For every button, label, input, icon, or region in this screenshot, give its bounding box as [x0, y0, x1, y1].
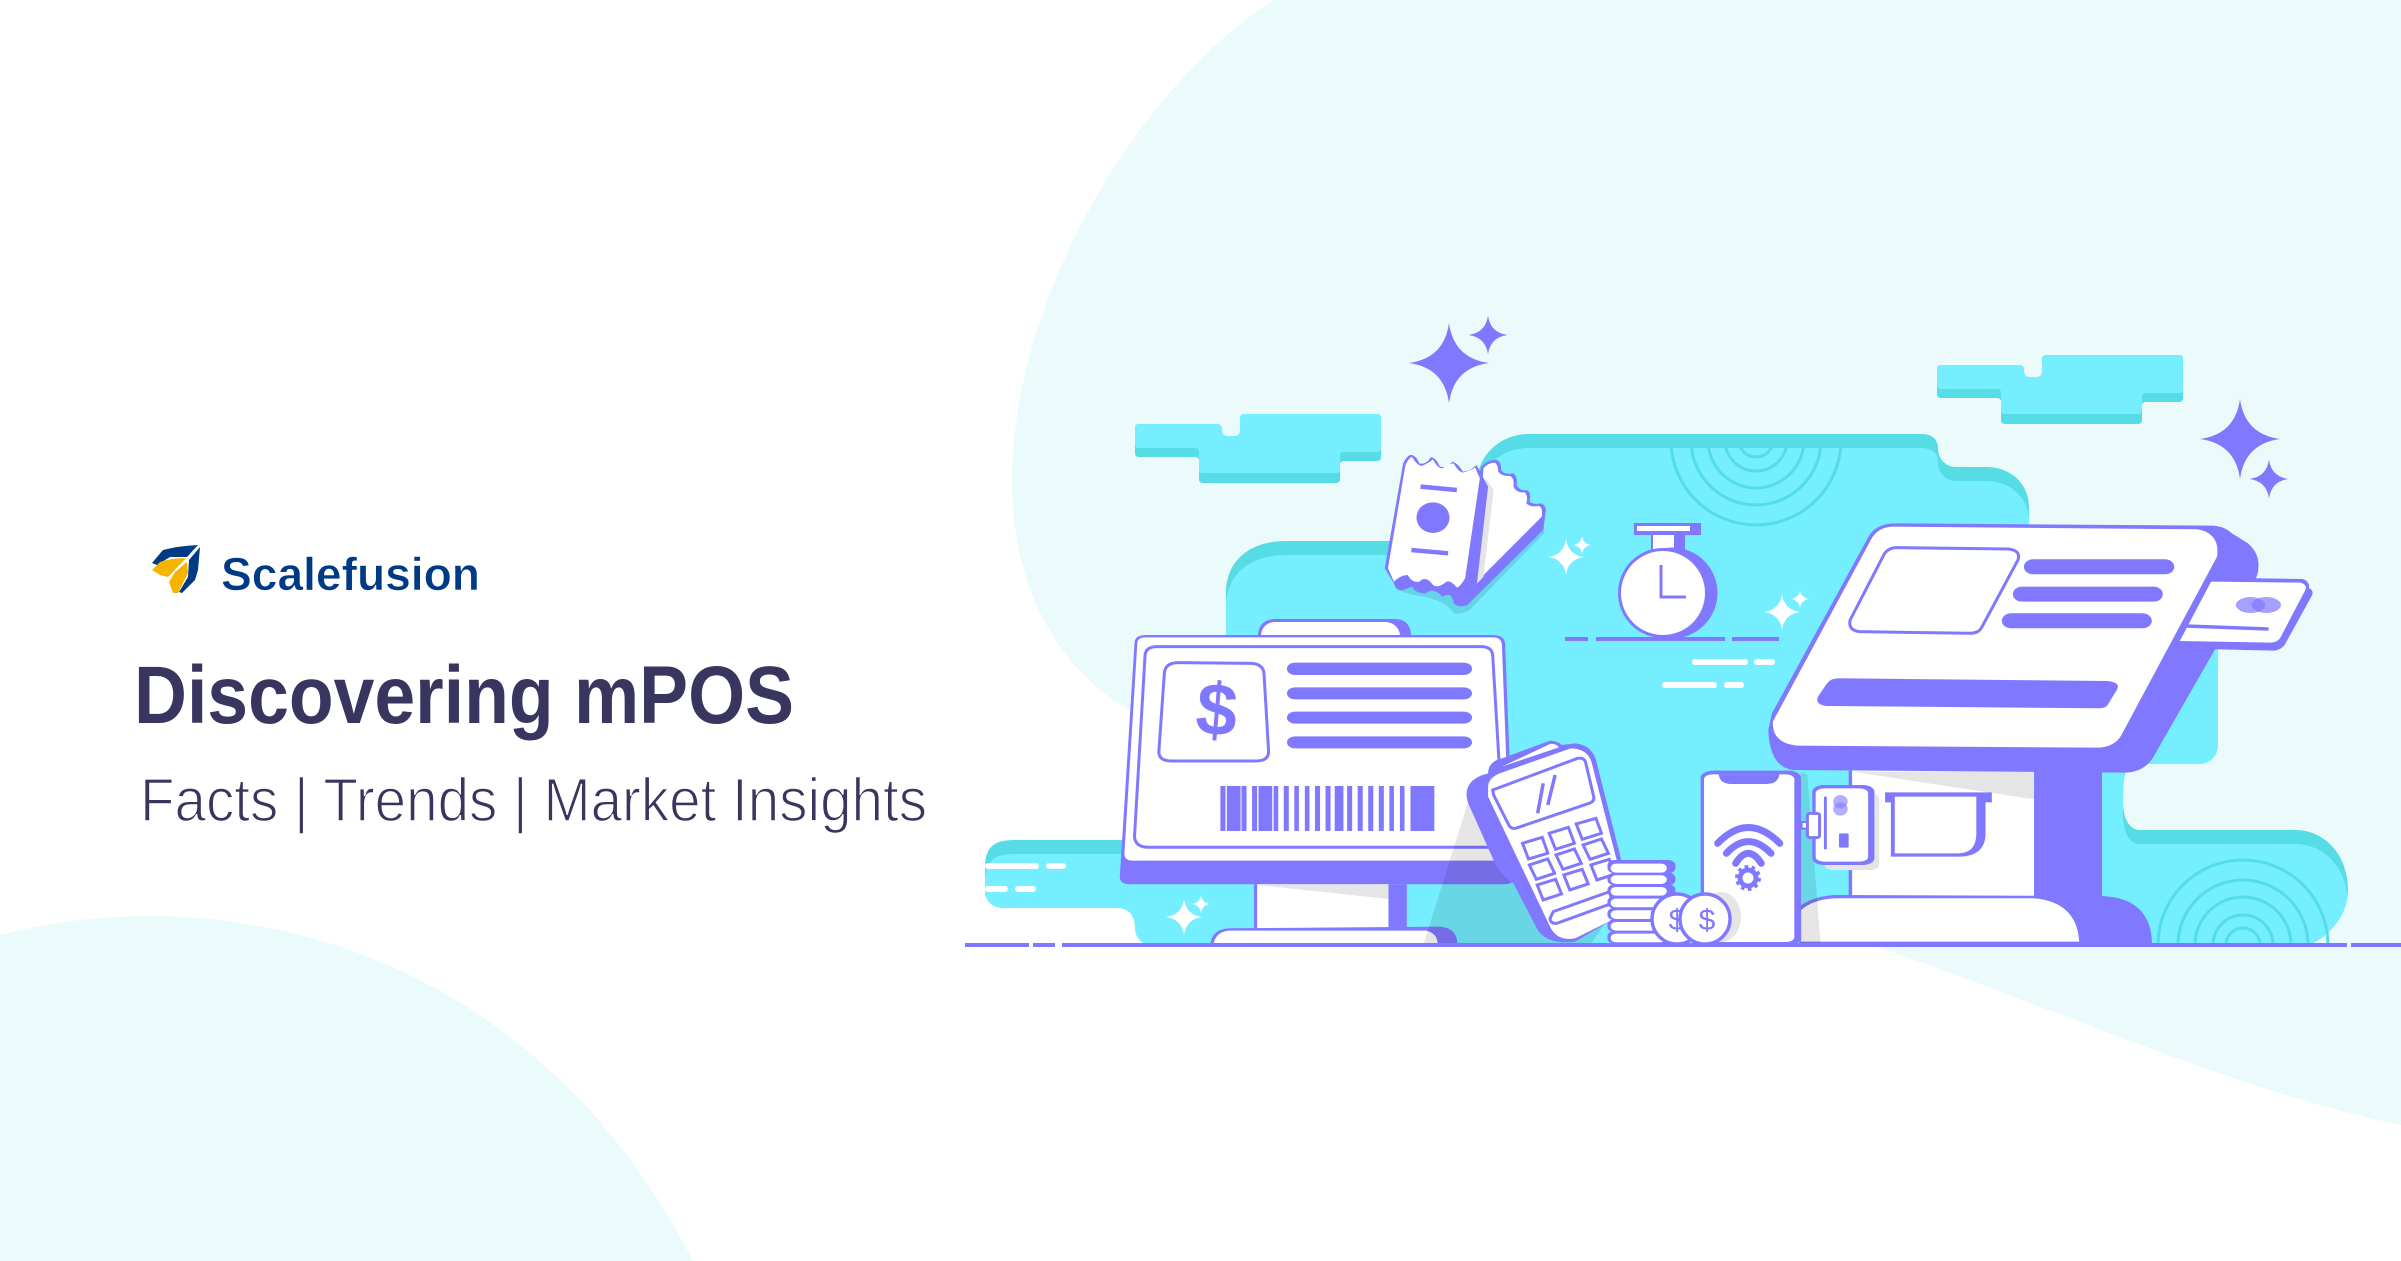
coins: $ — [1669, 904, 1686, 937]
cloud right — [1937, 355, 2183, 424]
receipt slot — [1885, 792, 1992, 857]
coins: $ — [1699, 904, 1716, 937]
icon: stopwatch — [1620, 523, 1718, 638]
background blob: bottom left — [0, 916, 693, 1261]
coin stack — [1607, 860, 1675, 944]
price tag panel — [1159, 663, 1269, 761]
card reader — [1802, 785, 1879, 870]
white speed dashes — [985, 659, 1775, 892]
logo icon — [152, 545, 200, 593]
title: Discovering mPOS — [134, 650, 794, 741]
sparkle stars: purple — [1409, 316, 2288, 498]
icon: tickets — [1385, 455, 1546, 614]
phone gear icon — [1736, 866, 1760, 890]
background blob: large upper right — [1012, 0, 2401, 1125]
ripple rings: bottom right — [2156, 858, 2330, 943]
monitor stand — [1210, 884, 1457, 944]
kiosk tablet with card — [1768, 523, 2313, 773]
monitor — [1120, 635, 1514, 944]
sparkle stars: white — [1166, 536, 1809, 935]
kiosk stand and base — [1799, 767, 2152, 945]
subtitle: Facts | Trends | Market Insights — [140, 766, 927, 834]
cyan backdrop shape — [985, 434, 2348, 943]
barcode — [1220, 786, 1434, 831]
text lines — [1287, 663, 1472, 748]
monitor back tab — [1258, 619, 1411, 636]
payment card — [2179, 578, 2313, 651]
coins — [1652, 892, 1741, 944]
ripple rings: top — [1670, 448, 1842, 526]
card terminal — [1424, 741, 1621, 943]
logo wordmark: Scalefusion — [221, 548, 480, 600]
ground line — [965, 943, 2401, 947]
phone with wifi icon — [1701, 771, 1821, 945]
dollar sign: $ — [1193, 666, 1241, 753]
cloud left — [1135, 414, 1381, 483]
dashed line under stopwatch — [1565, 637, 1779, 641]
